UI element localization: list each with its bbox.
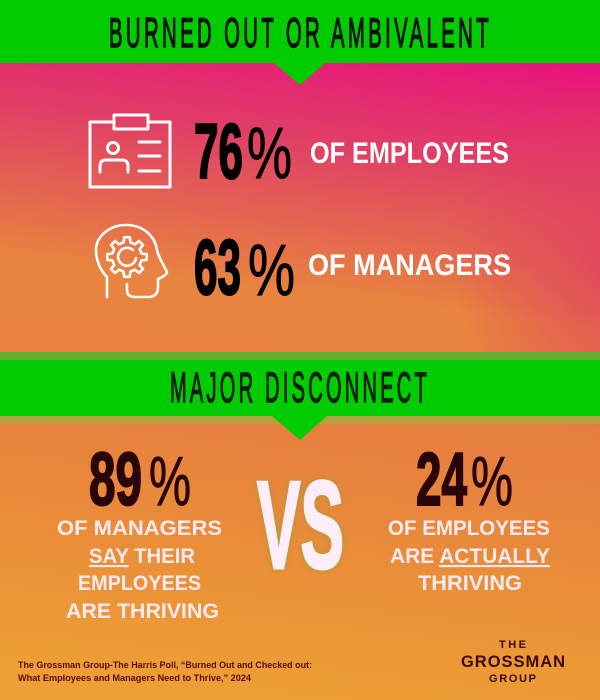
text: employees are actually thriving: THRIVING [418,571,522,595]
source citation [18,660,312,684]
logo: the grossman group: GROUP [489,673,536,685]
icon: employee id badge [90,115,170,187]
text: managers say their employees are thriving: EMPLOYEES [78,571,201,595]
stat: 63%: % [248,231,295,311]
label: of managers: OF MANAGERS [308,249,511,282]
text: employees are actually thriving [388,516,550,595]
banner: burned out or ambivalent [0,0,600,85]
text: managers say their employees are thriving [57,516,222,623]
text: managers say their employees are thriving: OF MANAGERS [57,516,222,540]
stat: 89%: % [149,442,191,520]
icon: head with gear [96,225,167,297]
text: employees are actually thriving: OF EMPLOYEES [388,516,550,540]
stat: 24%: 24 [416,437,467,521]
stat: 24%: % [471,442,513,520]
stat: 76%: % [247,114,292,194]
logo: the grossman group: THE [499,639,526,651]
banner: major disconnect [0,352,600,440]
text: managers say their employees are thriving: ARE THRIVING [66,599,219,623]
label: of employees: OF EMPLOYEES [310,137,509,170]
text: managers say their employees are thriving: SAY THEIR [89,544,195,568]
versus mark: VS [257,457,344,595]
stat: 63%: 63 [194,223,241,311]
stat: 76%: 76 [194,107,243,195]
text: employees are actually thriving: ARE ACTUALLY [390,544,550,568]
source citation: The Grossman Group-The Harris Poll, “Burned Out and Checked out: [18,660,312,671]
source citation: What Employees and Managers Need to Thrive,” 2024 [18,673,252,684]
logo: the grossman group [461,639,565,685]
logo: the grossman group: GROSSMAN [461,653,565,671]
stat: 89%: 89 [89,437,142,521]
